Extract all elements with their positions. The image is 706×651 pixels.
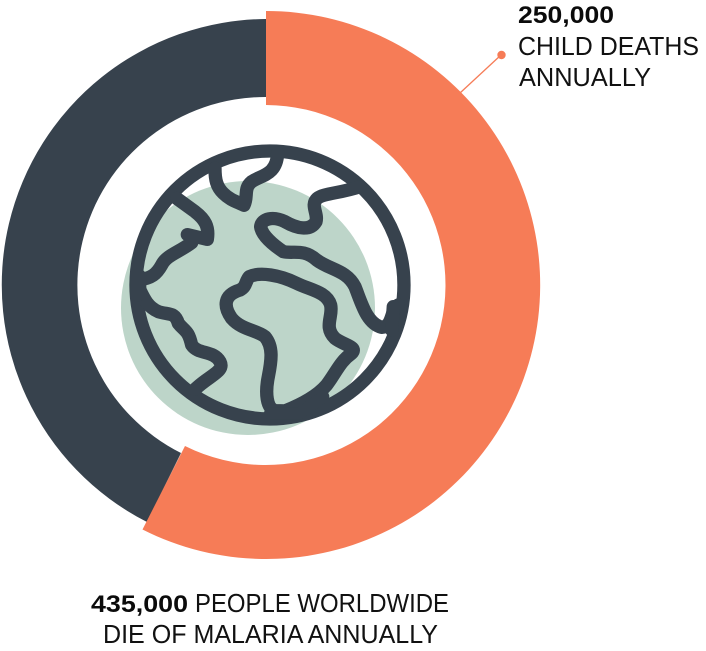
caption: worldwide deaths xyxy=(91,588,449,649)
icon: globe xyxy=(136,151,404,419)
callout: child deaths: CHILD DEATHS xyxy=(518,31,699,61)
caption: worldwide deaths: PEOPLE WORLDWIDE xyxy=(195,588,449,618)
callout: child deaths: 250,000 xyxy=(518,2,614,29)
donut segment: dark remainder xyxy=(2,19,266,522)
green circle behind globe xyxy=(121,181,375,435)
callout: child deaths: ANNUALLY xyxy=(519,62,651,92)
callout: child deaths xyxy=(518,2,699,92)
caption: worldwide deaths: DIE OF MALARIA ANNUALLY xyxy=(103,619,438,649)
leader line with dot xyxy=(460,51,506,93)
donut segment: orange child deaths xyxy=(142,11,540,559)
caption: worldwide deaths: 435,000 xyxy=(91,591,188,618)
